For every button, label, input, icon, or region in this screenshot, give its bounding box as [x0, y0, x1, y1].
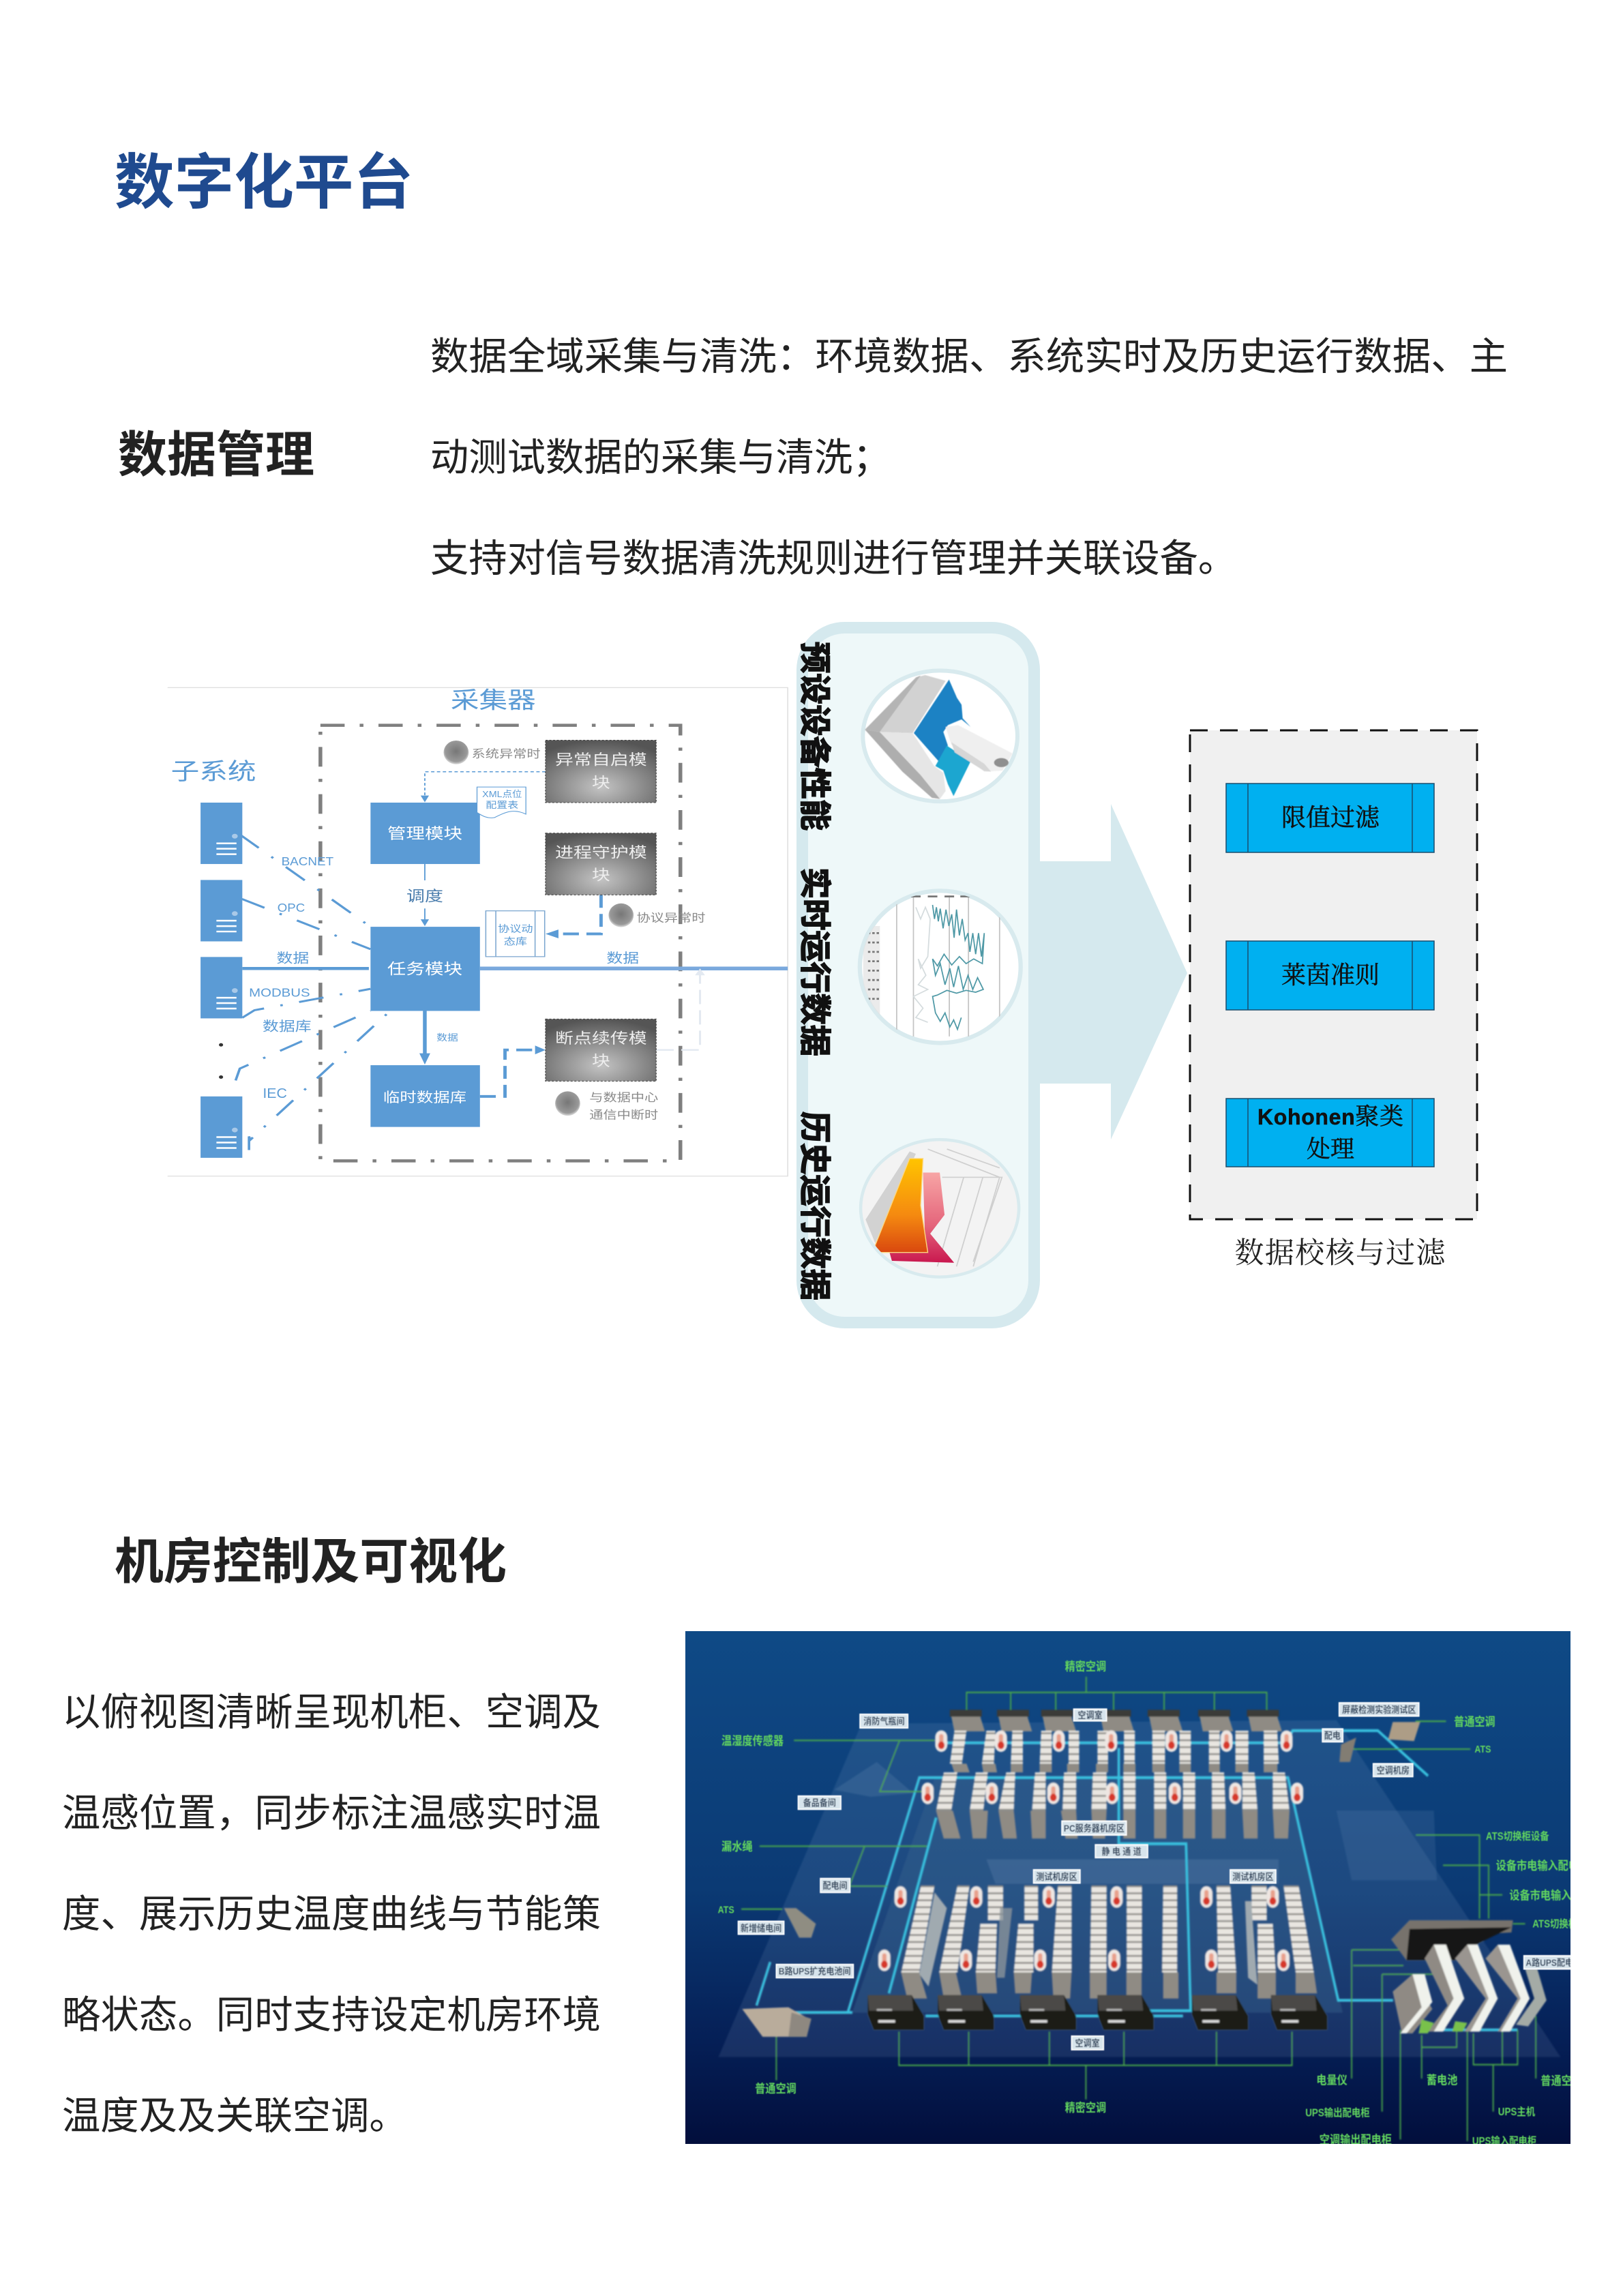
green device labels: UPS输入配电柜	[1472, 2134, 1536, 2147]
box: 莱茵准则: 莱茵准则	[1281, 961, 1380, 989]
text block: machine room description: 度、展示历史温度曲线与节能策	[62, 1892, 601, 1935]
box: 限值过滤	[1226, 784, 1434, 852]
box: Kohonen聚类处理	[1226, 1099, 1434, 1167]
white area tags: 备品备间	[803, 1798, 836, 1808]
green device labels: 精密空调	[1065, 1660, 1106, 1673]
text block: machine room description: 以俯视图清晰呈现机柜、空调及	[62, 1690, 601, 1733]
white area tags: 测试机房区	[1036, 1871, 1077, 1882]
green device labels: 设备市电输入配电柜	[1509, 1888, 1603, 1903]
module: 任务模块: 任务模块	[387, 961, 462, 978]
exception indicators: 协议异常时	[636, 911, 705, 924]
green device labels: 精密空调	[1065, 2101, 1106, 2115]
icon: historical chart	[861, 1139, 1024, 1281]
cyan cabling	[756, 1731, 1517, 2030]
module: 异常自启模块: 块	[592, 775, 610, 791]
label: subsystem title: 子系统	[171, 760, 256, 785]
white area tags: 消防气瓶间	[863, 1716, 905, 1727]
white area tags: 配电间	[822, 1880, 848, 1891]
white area tags	[739, 1703, 1576, 2050]
caption: 数据校核与过滤: 数据校核与过滤	[1234, 1238, 1446, 1270]
panel: data validation and filtering	[1190, 730, 1477, 1219]
server racks row 2	[936, 1772, 1290, 1838]
green device labels: 电量仪	[1316, 2074, 1347, 2087]
heading: 数据管理: 数据管理	[118, 428, 314, 483]
XML config document	[477, 787, 526, 818]
box: Kohonen聚类处理: 处理	[1307, 1136, 1354, 1163]
green device labels: 普通空调	[1454, 1715, 1495, 1729]
XML config document: XML点位	[482, 789, 522, 800]
text block: data management description	[430, 335, 1508, 580]
module: 断点续传模块: 断点续传模	[555, 1030, 647, 1047]
icon: realtime chart	[860, 891, 1021, 1043]
module: 临时数据库: 临时数据库	[383, 1090, 466, 1105]
green device labels: ATS	[1474, 1744, 1491, 1755]
collector dashed frame	[321, 726, 681, 1161]
protocol links	[236, 835, 390, 1150]
floor air conditioner	[742, 2008, 812, 2037]
green connection lines	[741, 1677, 1536, 2141]
protocol dynamic library	[486, 911, 545, 957]
exception indicators: 与数据中心	[589, 1091, 658, 1103]
module: 异常自启模块	[546, 740, 656, 803]
white area tags: 静 电 通 道	[1101, 1846, 1142, 1857]
arrow	[1040, 804, 1187, 1139]
text block: data management description: 动测试数据的采集与清洗；	[430, 436, 891, 479]
调度 label: 调度	[406, 888, 443, 905]
text block: machine room description: 略状态。同时支持设定机房环境	[62, 1993, 601, 2036]
protocol labels: 数据	[606, 950, 639, 966]
diagram: collector architecture	[168, 687, 788, 1176]
module: 断点续传模块: 块	[592, 1052, 610, 1069]
text block: data management description: 数据全域采集与清洗：环境数据、系统实时及历史运行数据、主	[430, 335, 1508, 378]
box: Kohonen聚类处理: Kohonen聚类	[1257, 1103, 1403, 1130]
exception indicators: 系统异常时	[472, 747, 541, 760]
ATS cabinet	[784, 1722, 1420, 1938]
protocol dynamic library: 协议动	[498, 924, 533, 935]
module: 任务模块	[370, 927, 480, 1011]
protocol labels: 数据库	[263, 1018, 312, 1034]
server racks row 3	[901, 1885, 1317, 1999]
green device labels: 漏水绳	[721, 1840, 753, 1853]
white area tags: 空调室	[1075, 2038, 1100, 2048]
heading: 机房控制及可视化: 机房控制及可视化	[115, 1535, 507, 1590]
protocol labels: BACNET	[282, 855, 333, 869]
module: 临时数据库	[370, 1065, 480, 1127]
module: 异常自启模块: 异常自启模	[555, 751, 647, 769]
text block: data management description: 支持对信号数据清洗规则进行管理并关联设备。	[430, 537, 1236, 580]
protocol labels: 数据	[277, 950, 309, 966]
image: machine room top view	[685, 1631, 1603, 2147]
vertical label: realtime data: 实时运行数据	[797, 867, 833, 1056]
vertical label: historical data: 历史运行数据	[797, 1112, 833, 1300]
subsystem servers	[200, 803, 242, 1158]
module: 管理模块	[370, 803, 480, 864]
green device labels: 设备市电输入配电柜	[1496, 1859, 1589, 1873]
platform	[719, 1720, 1560, 2057]
protocol labels: IEC	[263, 1086, 287, 1101]
exception indicators: 通信中断时	[589, 1109, 658, 1121]
UPS battery array	[1391, 1920, 1547, 2033]
module: 断点续传模块	[546, 1019, 656, 1081]
white area tags: PC服务器机房区	[1064, 1823, 1125, 1834]
green device labels: 空调输出配电柜	[1320, 2133, 1392, 2147]
green device labels	[718, 1660, 1603, 2147]
protocol labels	[249, 855, 639, 1101]
XML config document: 配置表	[486, 800, 519, 811]
protocol labels: OPC	[278, 901, 305, 915]
text block: machine room description	[62, 1690, 601, 2137]
precision air conditioners	[867, 1995, 1327, 2030]
module: 进程守护模块	[546, 833, 656, 895]
green device labels: ATS切换柜	[1532, 1918, 1577, 1930]
green device labels: 蓄电池	[1427, 2074, 1457, 2087]
module: 进程守护模块: 进程守护模	[555, 844, 647, 861]
panel: input data	[802, 627, 1034, 1323]
exception indicators	[444, 741, 705, 1121]
white area tags: 配电	[1324, 1730, 1341, 1741]
text block: machine room description: 温感位置，同步标注温感实时温	[62, 1791, 601, 1834]
green device labels: UPS输出配电柜	[1305, 2106, 1370, 2119]
protocol labels: MODBUS	[249, 986, 310, 1000]
green device labels: 普通空调	[1540, 2074, 1582, 2088]
white area tags: B路UPS扩充电池间	[779, 1966, 851, 1977]
title: 数字化平台	[115, 149, 413, 216]
arrowheads	[419, 796, 705, 1064]
air conditioning units	[950, 1710, 1282, 1731]
white area tags: 空调机房	[1377, 1765, 1410, 1776]
label: collector title: 采集器	[451, 688, 536, 714]
white area tags: 测试机房区	[1232, 1871, 1274, 1882]
white area tags: A路UPS配电	[1525, 1957, 1573, 1968]
white area tags: 新增储电间	[741, 1923, 781, 1934]
green device labels: ATS切换柜设备	[1486, 1830, 1549, 1843]
protocol dynamic library: 态库	[504, 936, 527, 947]
module: 管理模块: 管理模块	[387, 826, 462, 843]
green device labels: ATS	[718, 1905, 734, 1915]
box: 限值过滤: 限值过滤	[1281, 804, 1380, 831]
white area tags: 空调室	[1078, 1710, 1103, 1720]
text block: machine room description: 温度及及关联空调。	[62, 2094, 408, 2137]
icon: equipment	[863, 670, 1017, 801]
vertical label: preset equipment: 预设设备性能	[797, 642, 833, 831]
data flow lines	[242, 772, 788, 1097]
green device labels: 普通空调	[755, 2082, 796, 2096]
green device labels: 温湿度传感器	[721, 1734, 784, 1748]
server racks row 1	[950, 1731, 1279, 1772]
module: 进程守护模块: 块	[592, 867, 610, 884]
box: 莱茵准则	[1226, 941, 1434, 1010]
temperature sensors	[878, 1730, 1303, 1971]
green device labels: UPS主机	[1498, 2105, 1536, 2118]
protocol labels: 数据	[436, 1033, 458, 1043]
white area tags: 屏蔽检测实验测试区	[1342, 1704, 1416, 1715]
